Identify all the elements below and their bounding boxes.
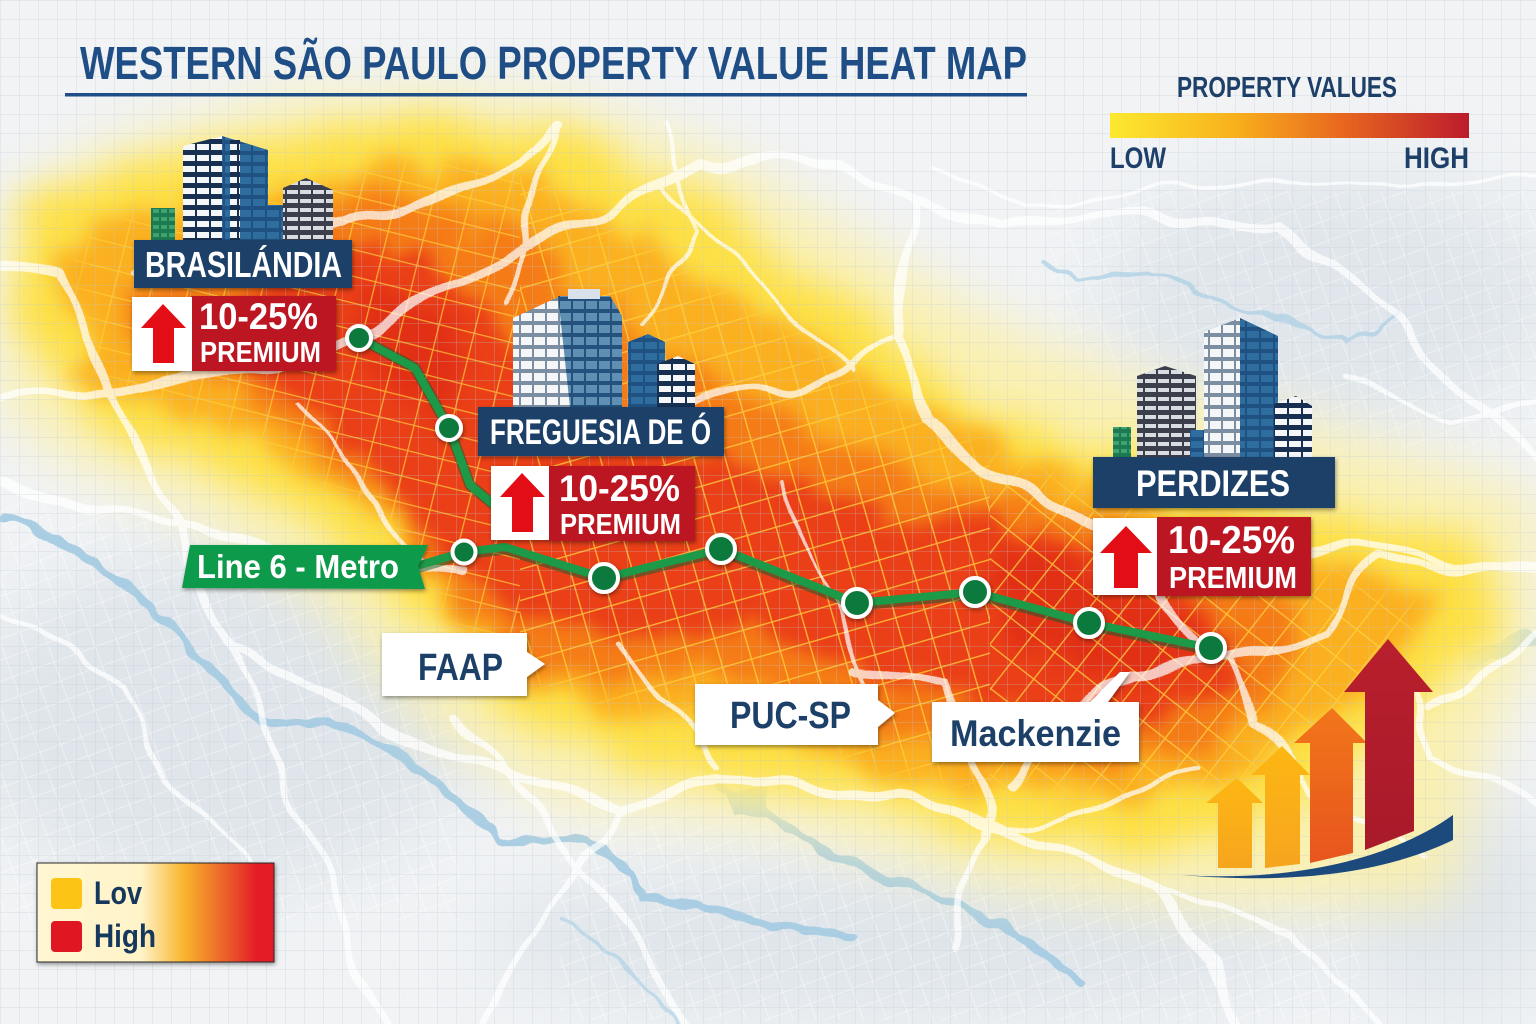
line 6 banner: Line 6 - Metro — [197, 548, 399, 585]
title: WESTERN SÃO PAULO PROPERTY VALUE HEAT MAP — [80, 37, 1027, 89]
rivers — [0, 258, 1530, 1024]
legend: low and high key: High — [94, 918, 156, 954]
metro stations — [347, 326, 1225, 662]
callout: Mackenzie: Mackenzie — [950, 713, 1121, 754]
premium badge: Brasilândia: 10-25% — [199, 296, 318, 337]
building cluster: Brasilândia — [151, 136, 333, 242]
callout: Mackenzie — [932, 672, 1139, 762]
premium badge: Brasilândia: PREMIUM — [200, 337, 321, 369]
label: Brasilândia: BRASILÁNDIA — [145, 244, 342, 285]
building cluster: Perdizes — [1113, 318, 1312, 457]
legend: property values scale: PROPERTY VALUES — [1177, 72, 1397, 104]
callout: FAAP — [382, 633, 545, 696]
growth arrows icon — [1181, 639, 1453, 878]
label: Perdizes: PERDIZES — [1136, 463, 1290, 504]
callout: PUC-SP: PUC-SP — [730, 695, 851, 737]
legend: property values scale: HIGH — [1404, 142, 1469, 175]
label: Freguesia de Ó — [478, 407, 724, 456]
label: Freguesia de Ó: FREGUESIA DE Ó — [490, 412, 711, 452]
building cluster: Freguesia de Ó — [513, 289, 695, 407]
legend: low and high key: Lov — [94, 875, 142, 911]
legend: low and high key — [37, 863, 274, 962]
callout: FAAP: FAAP — [418, 647, 503, 689]
premium badge: Perdizes: PREMIUM — [1169, 560, 1297, 595]
metro line 6 route — [359, 338, 1211, 650]
label: Perdizes — [1093, 457, 1335, 508]
legend: property values scale — [1110, 72, 1469, 175]
label: Brasilândia — [134, 240, 352, 288]
premium badge: Perdizes: 10-25% — [1168, 519, 1295, 562]
premium badge: Freguesia de Ó: PREMIUM — [560, 509, 681, 541]
callout: PUC-SP — [695, 684, 895, 745]
premium badge: Perdizes — [1093, 517, 1311, 596]
premium badge: Freguesia de Ó — [491, 466, 695, 541]
legend: property values scale: LOW — [1110, 142, 1167, 175]
premium badge: Brasilândia — [132, 296, 336, 371]
premium badge: Freguesia de Ó: 10-25% — [559, 468, 680, 509]
